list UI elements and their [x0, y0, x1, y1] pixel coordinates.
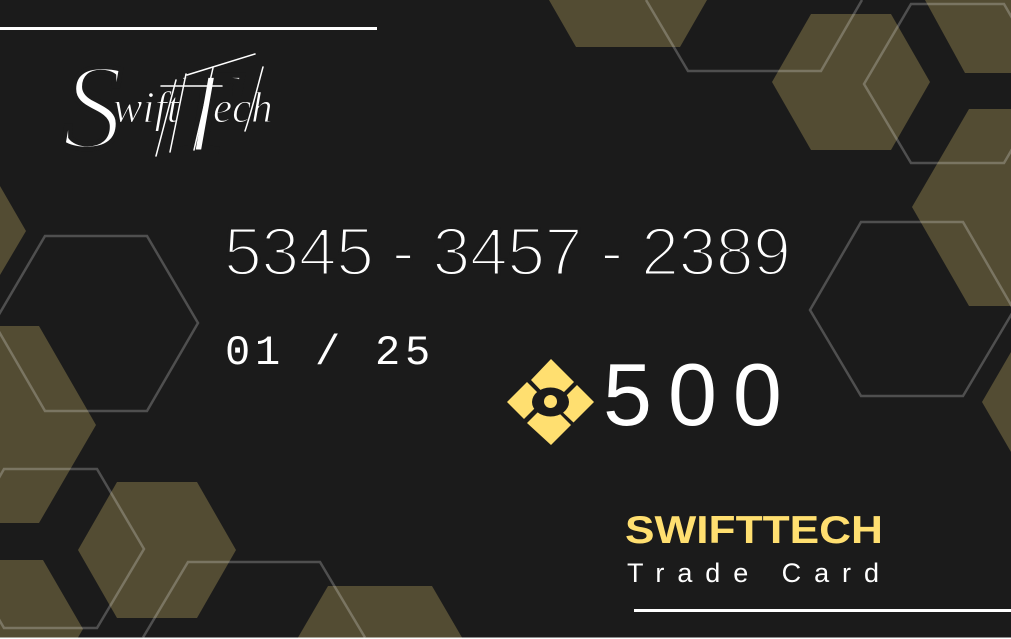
top rule — [0, 27, 377, 30]
brand name: SWIFTTECH — [625, 509, 883, 552]
card value: 500 — [603, 345, 798, 444]
signature logo: wift — [113, 83, 181, 132]
card number: 5345 - 3457 - 2389 — [224, 214, 791, 290]
bottom rule — [634, 609, 1011, 612]
signature logo: ech — [213, 85, 273, 132]
signature logo: T — [170, 47, 243, 178]
expiry date: 01 / 25 — [225, 329, 435, 377]
signature logo — [62, 40, 273, 178]
signature logo: S — [62, 40, 123, 175]
icon: yellow diamond — [507, 359, 594, 445]
card type: Trade Card — [627, 558, 879, 588]
